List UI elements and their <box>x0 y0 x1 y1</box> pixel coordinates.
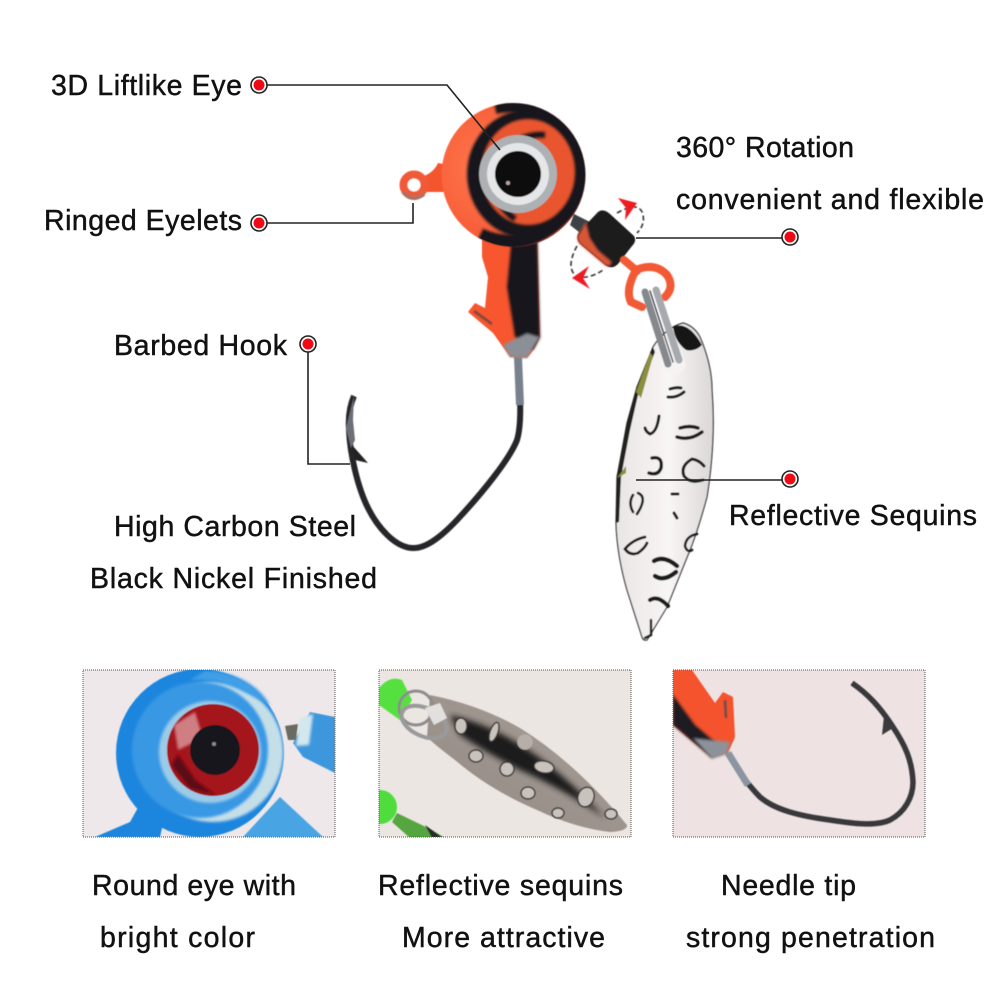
callout: Ringed Eyelets: Ringed Eyelets <box>44 205 242 237</box>
caption: reflective sequins: Reflective sequins <box>378 870 623 902</box>
dimple 8 <box>625 537 647 554</box>
text: hook material: Black Nickel Finished <box>90 563 377 595</box>
dimple 5 <box>683 459 704 481</box>
reflective spoon blade <box>616 323 713 640</box>
caption: round eye <box>92 870 296 954</box>
caption: needle tip <box>686 870 935 954</box>
caption: needle tip: strong penetration <box>686 922 935 954</box>
caption: reflective sequins: More attractive <box>402 922 605 954</box>
dimple 11 <box>650 598 668 606</box>
callout: Reflective Sequins <box>636 471 977 532</box>
jig lure photo <box>346 103 713 640</box>
jig shank <box>468 225 540 358</box>
swivel loop <box>624 260 671 307</box>
callout: 3D Liftlike Eye <box>51 70 500 150</box>
jig head <box>442 103 587 247</box>
caption: round eye: Round eye with <box>92 870 296 902</box>
callout: Barbed Hook: Barbed Hook <box>114 330 288 362</box>
caption: round eye: bright color <box>100 922 256 954</box>
split rings <box>645 290 679 364</box>
dimple 3 <box>677 426 702 438</box>
callout: 3D Liftlike Eye: 3D Liftlike Eye <box>51 70 242 102</box>
swivel barrel <box>570 210 635 267</box>
caption: reflective sequins <box>378 870 623 954</box>
callout: Ringed Eyelets <box>44 203 413 237</box>
dimple 10 <box>654 559 677 578</box>
panel: blue eye close-up <box>83 669 335 837</box>
eyelet ring <box>403 163 448 198</box>
callout: Reflective Sequins: Reflective Sequins <box>729 500 977 532</box>
callout: Barbed Hook <box>114 330 350 464</box>
dimple 9 <box>685 534 697 551</box>
dimple 6 <box>630 493 643 514</box>
text: hook material <box>90 511 377 595</box>
panel: sequin close-up <box>363 670 631 838</box>
panel: hook close-up <box>673 670 925 837</box>
dimple 1 <box>668 388 684 397</box>
text: hook material: High Carbon Steel <box>114 511 356 543</box>
callout: 360 rotation: 360° Rotation <box>676 132 854 164</box>
dimple 7 <box>672 494 678 518</box>
callout: 360 rotation: convenient and flexible <box>676 184 984 216</box>
dimple 4 <box>649 458 661 474</box>
caption: needle tip: Needle tip <box>721 870 856 902</box>
rotation arrows <box>571 198 643 289</box>
callout: 360 rotation <box>636 132 984 245</box>
hook <box>346 357 520 548</box>
dimple 2 <box>645 416 659 434</box>
fish eye <box>479 135 557 213</box>
